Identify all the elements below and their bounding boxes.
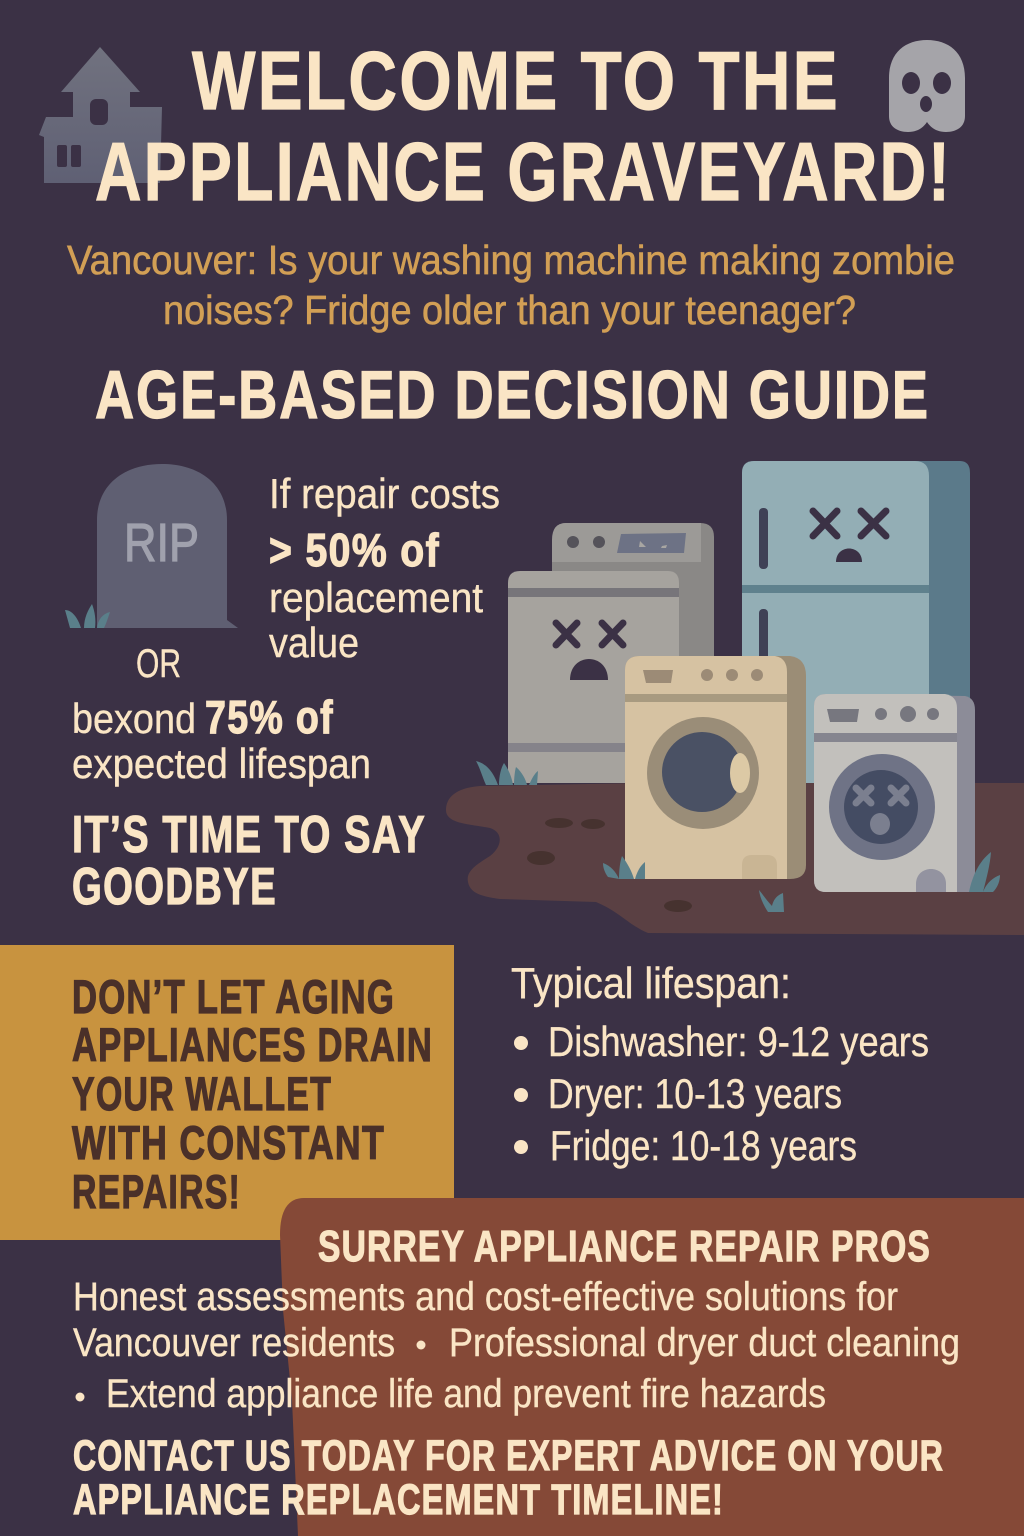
text block: repair cost rule: replacement [269,574,483,621]
panel: gold callout: REPAIRS! [72,1165,241,1218]
text block: typical lifespan list [511,959,929,1169]
grey washing machine [814,694,975,892]
text block: company services: Vancouver residents [73,1321,395,1365]
text block: lifespan rule: expected lifespan [72,740,371,787]
text block: repair cost rule: > 50% of [269,524,440,576]
icon: mud spots [527,818,692,912]
panel: rust company background [280,1198,1024,1536]
title [95,34,952,218]
call to action [73,1432,944,1524]
fridge [742,461,970,783]
text block: repair cost rule: value [269,619,359,666]
panel: gold callout: APPLIANCES DRAIN [72,1018,433,1071]
beige washing machine [625,656,806,879]
call to action: APPLIANCE REPLACEMENT TIMELINE! [73,1476,724,1524]
text: OR: OR [136,642,181,686]
panel: gold callout: DON’T LET AGING [72,970,395,1023]
panel: gold callout [0,945,454,1240]
panel: gold callout: YOUR WALLET [72,1067,332,1120]
text block: time to say goodbye: GOODBYE [72,858,277,916]
text block: company services: Honest assessments and cost-effective solutions for [73,1275,898,1319]
text block: company services: Extend appliance life and prevent fire hazards [106,1372,826,1416]
text block: typical lifespan list: Dishwasher: 9-12 years [548,1018,929,1065]
ground: mud patch [446,783,1024,935]
text block: time to say goodbye: IT’S TIME TO SAY [72,806,426,864]
icon: haunted house [39,47,162,183]
text block: typical lifespan list: Fridge: 10-18 years [550,1122,857,1169]
illustration: dead appliances in graveyard [446,461,1024,935]
back dryer [552,523,714,660]
text block: lifespan rule: 75% of [205,691,334,743]
icon: ghost [889,40,965,132]
title: WELCOME TO THE [192,34,840,127]
icon: RIP tombstone [65,464,238,628]
icon: RIP tombstone: RIP [124,513,199,573]
text block: lifespan rule: bexond [72,695,196,742]
subtitle: Vancouver: Is your washing machine making zombie [67,237,955,283]
text block: repair cost rule [269,470,500,666]
text block: repair cost rule: If repair costs [269,470,500,517]
text block: company services [73,1275,960,1416]
text block: typical lifespan list: Dryer: 10-13 years [548,1070,842,1117]
subtitle: noises? Fridge older than your teenager? [163,287,856,333]
text block: typical lifespan list: Typical lifespan: [511,959,791,1008]
subtitle [67,237,955,333]
text block: time to say goodbye [72,806,426,916]
text block: lifespan rule [72,691,371,787]
front appliance with sad face [508,571,679,783]
panel: gold callout: WITH CONSTANT [72,1116,385,1169]
text block: company services: Professional dryer duct cleaning [449,1321,960,1365]
icon: grass tufts [476,761,1000,912]
